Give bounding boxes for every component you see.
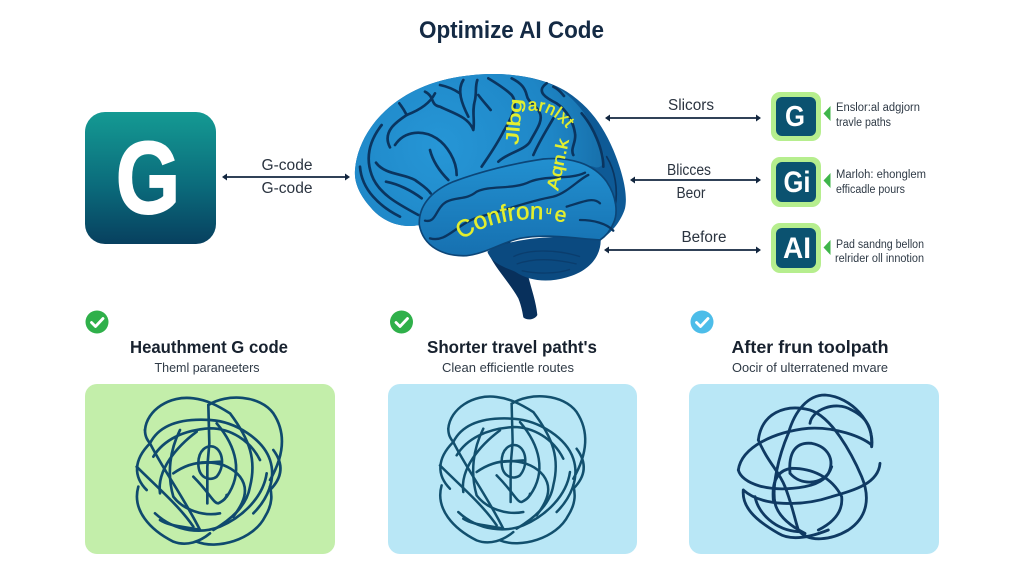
toolpath tangle: [440, 396, 585, 543]
yellow brain lettering: e: [555, 210, 566, 222]
side note 2: [836, 169, 926, 196]
connector: Blicces / Beor: [630, 162, 761, 202]
blue card: [689, 384, 939, 554]
panel: Shorter travel paths: [388, 310, 637, 554]
yellow brain lettering: Confron: [456, 204, 542, 237]
side note 2: efficadle pours: [836, 184, 905, 196]
yellow brain lettering: arnlxt: [528, 101, 574, 128]
connector: Blicces / Beor: Beor: [676, 185, 706, 202]
side note 1: Enslor:al adgjorn: [836, 102, 920, 114]
icon: Gi badge: [771, 157, 821, 207]
side note 3: Pad sandng bellon: [836, 239, 924, 251]
panel: Heauthment G code: [85, 310, 335, 554]
side note 3: [835, 239, 924, 265]
toolpath tangle: [738, 395, 880, 539]
subheading: Oocir of ulterratened mvare: [732, 360, 888, 375]
panel: After frun toolpath: [689, 310, 939, 554]
icon: large G app tile: [85, 112, 216, 244]
connector: Before: Before: [682, 229, 726, 246]
subheading: Theml paraneeters: [154, 360, 260, 375]
yellow brain lettering: Aqn.k: [543, 136, 573, 192]
side note 1: [836, 102, 920, 129]
icon: blue check: [690, 310, 714, 334]
left connector: G-code arrow and labels: G-code: [262, 180, 312, 197]
heading: After frun toolpath: [732, 337, 888, 357]
connector: Blicces / Beor: Blicces: [667, 162, 711, 179]
icon: Gi badge: Gi: [784, 166, 810, 199]
yellow brain lettering: Jlbg: [502, 98, 526, 145]
subheading: Clean efficientle routes: [442, 360, 574, 375]
side note 3: relrider oll innotion: [835, 253, 924, 265]
connector: Slicors: Slicors: [668, 97, 714, 114]
side note 1: travle paths: [836, 117, 891, 129]
left connector: G-code arrow and labels: G-code: [262, 157, 312, 174]
temporal lobe: [419, 159, 616, 256]
side note 2: Marloh: ehonglem: [836, 169, 926, 181]
yellow brain lettering: [456, 98, 574, 237]
icon: AI badge: AI: [783, 232, 811, 265]
green card: [85, 384, 335, 554]
heading: Shorter travel patht's: [427, 337, 597, 357]
connector: Slicors: [605, 97, 761, 122]
cerebellum and brain stem: [487, 237, 601, 319]
left connector: G-code arrow and labels: [222, 157, 350, 197]
icon: green check: [390, 310, 413, 334]
green pointer triangles: [824, 106, 830, 255]
toolpath tangle: [137, 398, 282, 545]
blue card: [388, 384, 637, 554]
heading: Heauthment G code: [130, 337, 288, 357]
brain illustration: [354, 74, 626, 320]
icon: AI badge: [771, 223, 821, 273]
cortex folds: [360, 78, 616, 217]
title: Optimize AI Code: [419, 17, 604, 44]
icon: large G app tile: G: [116, 121, 180, 235]
icon: green check: [86, 310, 108, 334]
yellow brain lettering: u: [546, 208, 552, 214]
icon: G badge: [771, 92, 821, 141]
cerebrum base: [355, 74, 626, 256]
connector: Before: [604, 229, 761, 254]
icon: G badge: G: [785, 101, 805, 133]
